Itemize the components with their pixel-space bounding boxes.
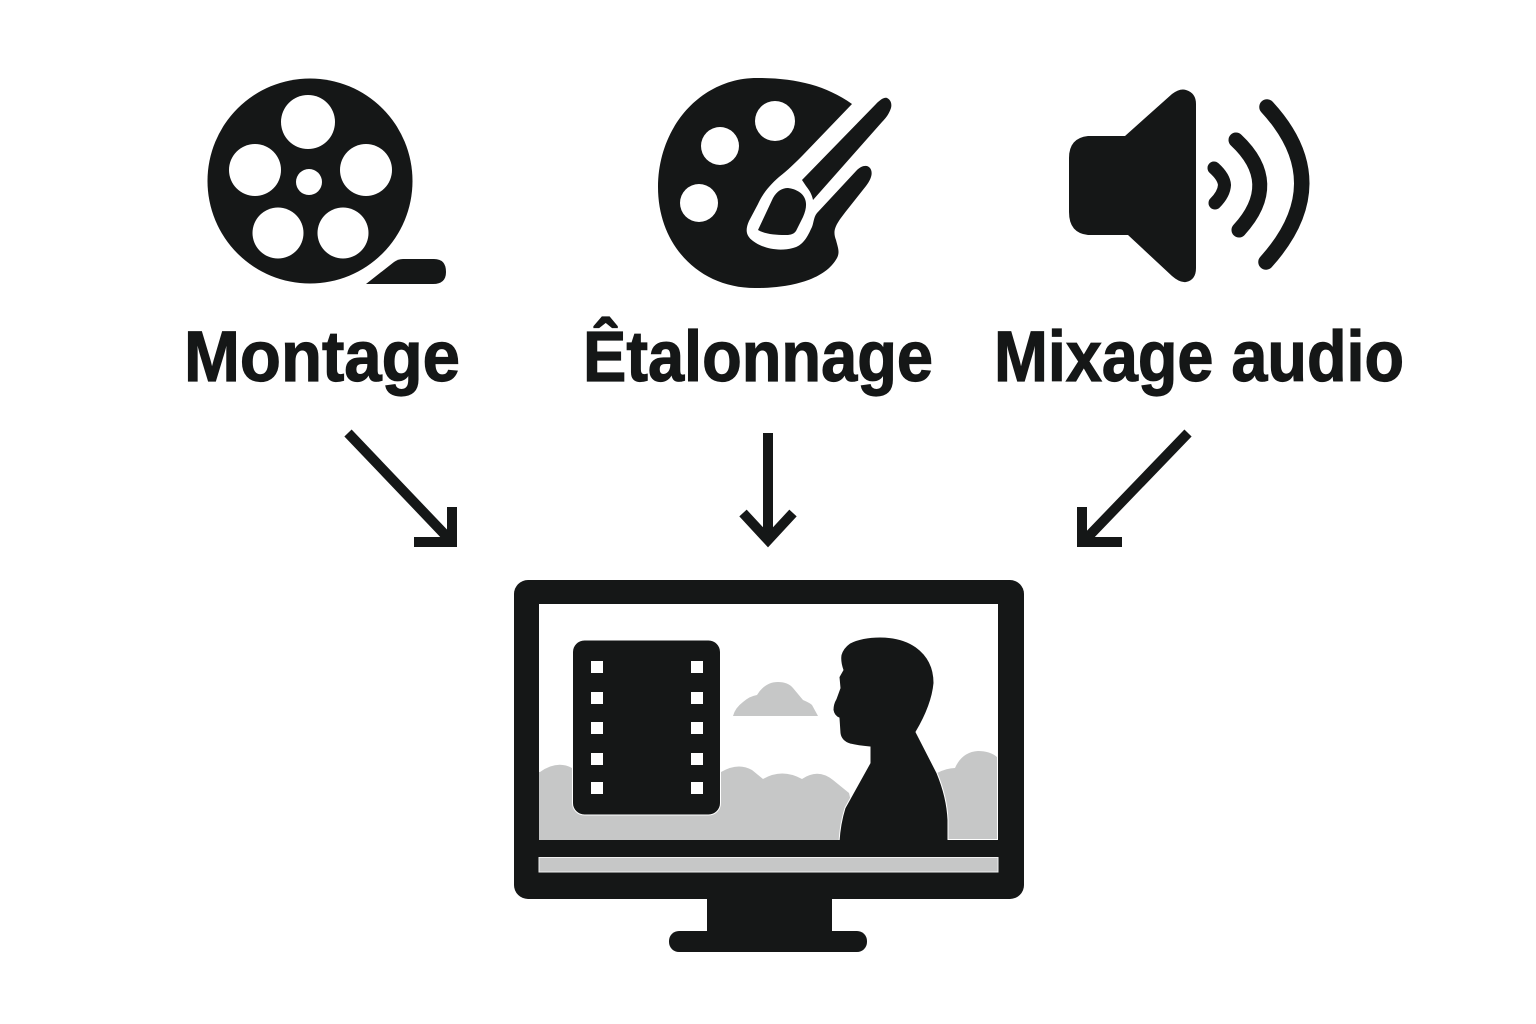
heading: Étalonnage: Êtalonnage: [583, 317, 933, 397]
icon: palette and brush: [658, 78, 891, 288]
heading: Montage: Montage: [184, 318, 460, 397]
arrow: left diagonal: [348, 433, 452, 542]
icon: computer monitor: [514, 580, 1024, 952]
arrow: right diagonal: [1082, 433, 1188, 542]
film strip: [572, 640, 720, 815]
cloud: [733, 682, 818, 716]
person silhouette: [833, 637, 948, 842]
brush tip: [758, 188, 806, 235]
icon: speaker with sound waves: [1069, 90, 1302, 282]
background hills: [539, 751, 997, 840]
arrow: center down: [743, 433, 793, 540]
monitor lower bezel: [514, 840, 1024, 857]
brush handle: [802, 98, 891, 200]
heading: Mixage audio: Mixage audio: [994, 318, 1404, 397]
icon: film reel: [208, 78, 446, 284]
